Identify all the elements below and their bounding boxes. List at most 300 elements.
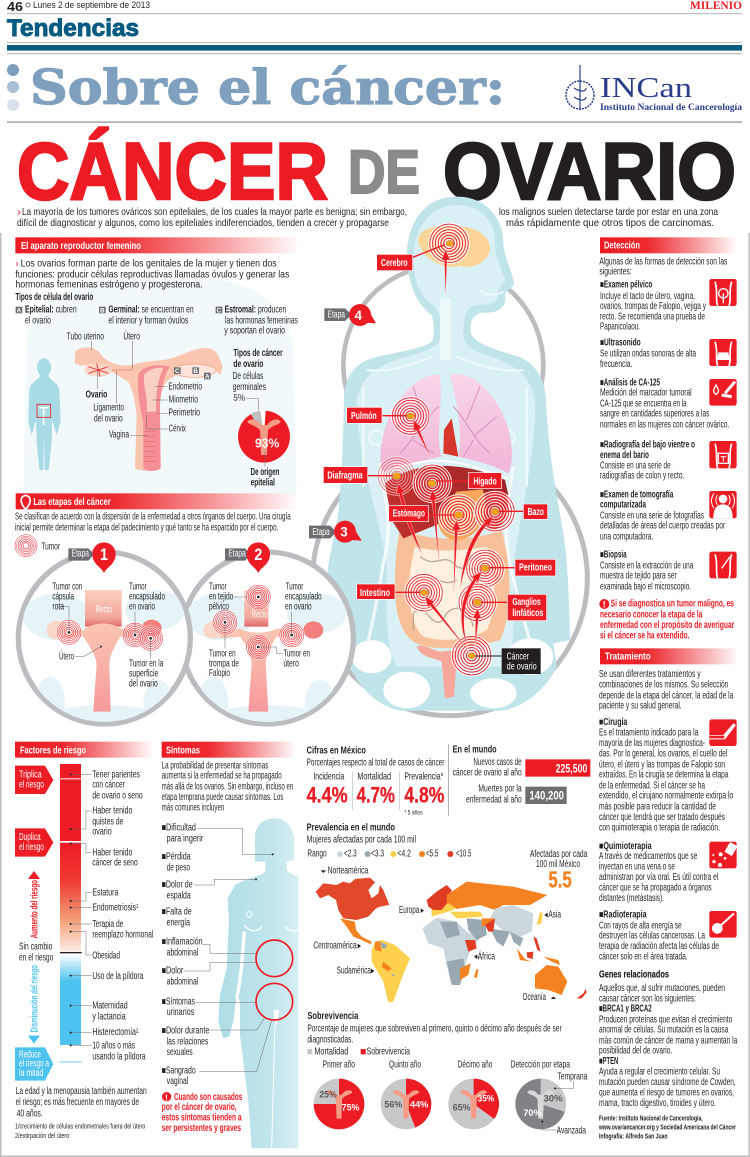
map labels: Centroamérica (313, 940, 357, 951)
risk factors: usando la píldora (92, 1052, 146, 1063)
description: Se clasifican de acuerdo con la dispersión de la enfermedad a otros órganos del cuerpo. Una cirugía (15, 511, 291, 522)
uterus diagram: Endometrio (168, 381, 202, 392)
label: Cáncer de ovario: de ovario (507, 661, 537, 672)
symptom list: ■Dolor durante (162, 1025, 210, 1036)
map labels: África (478, 949, 495, 962)
pie chart: tipos de cáncer de ovario: De origen (251, 467, 279, 478)
map legend (307, 849, 472, 860)
note: 2/extirpación del útero (15, 1133, 69, 1140)
map legend: <10.5 (456, 849, 472, 860)
icon: x-ray (709, 441, 737, 468)
legend: tumor: Tumor (41, 541, 60, 552)
genes relacionados: posibilidad del de ovario. (599, 1046, 672, 1057)
heading (600, 648, 737, 664)
genes relacionados: ■PTEN (599, 1056, 618, 1067)
label: Cerebro: Cerebro (381, 258, 408, 269)
cell types: las hormonas femeninas (225, 315, 298, 326)
stage 1 diagram: Recto (96, 605, 112, 616)
tumor rings (377, 223, 515, 676)
en el mundo (453, 745, 590, 805)
note (15, 1086, 147, 1140)
label: Hígado: Hígado (473, 476, 497, 487)
tag: triplica: Triplica (19, 770, 42, 781)
risk factors: Estatura (92, 888, 119, 899)
en el mundo: 225,500 (556, 761, 588, 775)
risk factors: y lactancia (92, 1012, 126, 1023)
page frame (0, 233, 750, 1157)
symptom list: energía (167, 918, 190, 929)
item: quimioterapia: distantes (metástasis). (599, 893, 664, 904)
pie: décimo año: Décimo año (458, 1059, 493, 1070)
symptom leaders (183, 828, 274, 1072)
cell types: Tipos de célula del ovario (15, 292, 93, 303)
stage 2 diagram: Recto (252, 609, 268, 620)
uterus diagram: del ovario (94, 414, 123, 425)
stage 2 diagram: Tumor (286, 581, 304, 592)
red zones (256, 940, 293, 1020)
stage 1 diagram: 1 (100, 545, 108, 564)
body figure with metastasis (stages 3 and 4) (309, 197, 587, 716)
risk factors (70, 769, 153, 1063)
heading (15, 742, 152, 758)
intestines (395, 530, 510, 648)
heading (16, 493, 296, 509)
icon: pelvic exam (709, 279, 737, 306)
heading and legend: Mortalidad (314, 1047, 348, 1058)
pie: décimo año: 65% (453, 1103, 471, 1113)
item: análisis CA-125: ■Análisis de CA-125 (600, 378, 660, 389)
pie: detección por etapa: 70% (523, 1108, 542, 1118)
panel: factores de riesgo (15, 742, 153, 1140)
label: Estómago (389, 506, 429, 522)
symptom list: las relaciones (167, 1036, 208, 1047)
diaphragm arc (380, 461, 508, 478)
main title (17, 127, 736, 217)
label: Diafragma: Diafragma (327, 470, 363, 481)
heart (443, 418, 458, 457)
cell types: el ovario (25, 315, 51, 326)
stage 2 diagram: Tumor en (283, 649, 310, 660)
label: Cerebro (377, 254, 413, 271)
red warning: necesario conocer la etapa de la (600, 610, 703, 621)
lungs (380, 374, 512, 473)
pie: primer año (314, 1059, 364, 1129)
uterus diagram: Miometrio (169, 395, 198, 406)
intro (599, 256, 727, 277)
heading (15, 237, 297, 253)
label: Ganglios linfáticos: Ganglios (512, 597, 541, 608)
intro: La probabilidad de presentar síntomas (162, 760, 268, 771)
item: ultrasonido: Se utilizan ondas sonoras de alta (600, 348, 696, 359)
pie: décimo año: 35% (478, 1094, 495, 1104)
stage 2 diagram: Etapa (228, 549, 246, 560)
item: cirugía (599, 717, 734, 833)
heading (162, 742, 294, 758)
cifras en méxico: 4.8% (404, 783, 444, 808)
tag: triplica: el riesgo (19, 780, 44, 791)
heading and legend: diagnosticadas. (307, 1034, 353, 1045)
badge: Etapa 4: Etapa (328, 309, 345, 320)
item: quimioterapia: ■Quimioterapia (599, 841, 652, 852)
cell types: B (100, 307, 105, 314)
logo: INCan: INCan (600, 72, 693, 104)
item: cirugía: ■Cirugía (599, 717, 628, 728)
risk factors: Haber tenido (92, 806, 133, 817)
cifras en méxico (307, 746, 445, 817)
stage 1 diagram: superficie (129, 669, 159, 680)
item: radiografía: ■Radiografía del bajo vientre o (600, 440, 695, 451)
item: radioterapia: cáncer solo en el área tratada. (599, 952, 688, 963)
cell types: Germinal: se encuentran en (108, 304, 194, 315)
pie chart: tipos de cáncer de ovario: 5% (233, 393, 245, 404)
badge: Etapa 3: 3 (340, 524, 348, 540)
heading and legend: Sobrevivencia (367, 1047, 410, 1058)
stage 1 diagram: Tumor (129, 581, 147, 592)
map legend: <3.3 (371, 849, 384, 860)
cifras en méxico: * 5 años (404, 810, 423, 817)
pie: décimo año (448, 1059, 499, 1129)
intro: siguientes: (599, 266, 632, 277)
banner: sobre el cáncer: Sobre el cáncer: (30, 60, 505, 116)
label: Bazo: Bazo (528, 507, 544, 518)
heading: El aparato reproductor femenino (21, 241, 141, 252)
icon: chemotherapy (709, 842, 738, 868)
icon: ultrasound (709, 339, 737, 366)
cell types: A (17, 307, 22, 314)
stage 1 diagram: rota (52, 601, 64, 612)
genes relacionados: ■BRCA1 y BRCA2 (599, 1004, 652, 1015)
axis labels: Sin cambio (19, 942, 53, 953)
item: radioterapia: Con rayos de alta energía se (599, 920, 682, 931)
stage 2 diagram (181, 542, 353, 735)
intro: etapa temprana puede causar síntomas. Los (162, 792, 283, 803)
stage 1 diagram: Útero (59, 649, 74, 662)
genes relacionados: causar cáncer son los siguientes: (599, 993, 696, 1004)
item: cirugía: Es el tratamiento indicado para la (599, 727, 699, 738)
symptom list: ■Síntomas (162, 997, 195, 1008)
label connectors (368, 245, 523, 602)
label: Ganglios linfáticos (507, 594, 547, 621)
risk factors: con cáncer (92, 780, 125, 791)
uterus diagram: C (175, 368, 180, 375)
pie: quinto año: 56% (384, 1099, 403, 1109)
liver and spleen (385, 466, 508, 538)
symptom list: abdominal (167, 948, 198, 959)
item: examen pélvico: Incluye el tacto de útero, vagina, (600, 291, 695, 302)
stage 1 diagram: Tumor con (52, 581, 82, 592)
pie chart: tipos de cáncer de ovario: germinales (233, 382, 266, 393)
label: Intestino (357, 584, 395, 599)
item: biopsia (600, 550, 694, 592)
label: Estómago: Estómago (393, 509, 425, 520)
map legend: <5.5 (426, 849, 439, 860)
icon: surgery (709, 719, 737, 746)
heading: Tratamiento (605, 652, 651, 663)
tag: reduce: el riesgo a (19, 1059, 49, 1070)
panel: síntomas (162, 742, 312, 1148)
icon: radiotherapy (709, 911, 737, 938)
intro text: difícil de diagnosticar y algunos, como los epiteliales indiferenciados, tienden a crecer y propagarse (17, 217, 389, 229)
description (15, 511, 291, 534)
arrows (396, 250, 493, 655)
tumor cores (393, 240, 499, 659)
label: Bazo (523, 504, 548, 519)
pie: quinto año: Quinto año (389, 1059, 421, 1070)
risk factors: Endometriosis¹ (92, 902, 139, 913)
main title: CÁNCER (17, 127, 328, 217)
red warning (162, 1092, 243, 1134)
pie: primer año: 25% (319, 1089, 337, 1099)
intro: aumenta si la enfermedad se ha propagado (162, 771, 282, 782)
main title: OVARIO (443, 127, 736, 217)
stage 2 diagram: pélvico (209, 601, 229, 612)
cifras en méxico: Prevalencia* (404, 772, 443, 783)
badge: Etapa 4: 4 (355, 307, 362, 323)
note: el riesgo; es más frecuente en mayores de (16, 1097, 139, 1108)
cifras en méxico: Incidencia (313, 772, 345, 783)
item: ultrasonido: ■Ultrasonido (600, 338, 641, 349)
red warning: por el cáncer de ovario, (162, 1102, 237, 1113)
note: La edad y la menopausia también aumentan (16, 1086, 147, 1097)
tag: duplica: Duplica (19, 832, 41, 843)
small uterus (417, 646, 460, 698)
item: tomografía: una computadora. (600, 531, 653, 542)
en el mundo: Muertes por la (478, 784, 522, 795)
intro: paciente y su salud general. (599, 701, 682, 712)
item: tomografía: ■Examen de tomografía (600, 490, 674, 501)
en el mundo: 140,200 (529, 789, 564, 803)
page header: Tendencias (7, 15, 139, 42)
item: quimioterapia: inyectan en una vena o se (599, 862, 675, 873)
label: Diafragma (323, 467, 368, 483)
female silhouette (218, 818, 298, 1148)
tag: duplica: el riesgo (19, 842, 44, 853)
risk scale bar (60, 764, 82, 1063)
logo: INCan (566, 65, 742, 113)
panel: tratamiento (598, 648, 738, 1140)
red warning: Cuando son causados (174, 1092, 243, 1103)
heading and legend: Porcentaje de mujeres que sobreviven al primero, quinto o décimo año después de ser (307, 1024, 562, 1035)
pie: detección por etapa: Avanzada (557, 1125, 586, 1136)
axis labels: Aumento del riesgo (29, 880, 40, 938)
symptom list: ■Sangrado (162, 1066, 196, 1077)
label: Cáncer de ovario (502, 648, 541, 674)
symptom list: abdominal (167, 977, 198, 988)
mexico figure: 5.5 (548, 867, 572, 893)
uterus diagram: Vagina (109, 429, 129, 440)
uterus diagram: B (193, 368, 198, 375)
item: biopsia: examinada bajo el microscopio. (600, 581, 691, 592)
item: radioterapia: ■Radioterapia (599, 909, 647, 920)
risk factors: cáncer de seno (92, 858, 138, 869)
pie: detección por etapa: Temprana (557, 1071, 588, 1082)
pie chart: tipos de cáncer de ovario: 93% (255, 436, 279, 451)
logo: INCan: Instituto Nacional de Cancerología (600, 103, 742, 113)
red warning (599, 599, 734, 642)
item: tomografía: computarizada (600, 500, 646, 511)
stage 1 diagram (18, 542, 190, 735)
heading: Detección (604, 241, 640, 252)
prevalencia heading: Mujeres afectadas por cada 100 mil (307, 835, 416, 846)
symptom list: sexuales (167, 1047, 193, 1058)
map labels: Norteamérica (328, 866, 369, 877)
badge: Etapa 3 (309, 521, 362, 543)
symptom list: ■Inflamación (162, 936, 203, 947)
cell types: el interior y forman óvulos (108, 315, 188, 326)
cifras en méxico: 4.7% (357, 783, 395, 808)
label: Ganglios linfáticos: linfáticos (512, 608, 544, 619)
en el mundo: Nuevos casos de (473, 757, 522, 768)
uterus diagram: Ovario (86, 389, 107, 400)
stage 1 diagram: cápsula (52, 592, 74, 603)
risk factors: Uso de la píldora (92, 971, 144, 982)
item: radiografía: radiografías de colon y recto. (600, 471, 684, 482)
pie: detección por etapa (511, 1059, 588, 1136)
item: biopsia: ■Biopsia (600, 550, 627, 561)
item: análisis CA-125: Medición del marcador tumoral (600, 388, 692, 399)
mexico figure: 100 mil México (536, 859, 580, 870)
stomach (438, 489, 485, 541)
label: Hígado (468, 473, 502, 489)
item: ultrasonido: frecuencia. (600, 359, 632, 370)
axis labels (19, 871, 54, 1044)
panel: cifras y mapa (307, 744, 590, 1003)
cell types: Estromal: producen (225, 304, 286, 315)
tag: reduce: la mitad (19, 1068, 43, 1079)
intro: Se usan diferentes tratamientos y (599, 669, 701, 680)
genes relacionados (599, 969, 738, 1109)
risk factors: Tener parientes (92, 769, 140, 780)
label: Cáncer de ovario: Cáncer (507, 651, 529, 662)
panel: etapas del cáncer (14, 493, 353, 735)
note: 1/crecimiento de células endometriales fuera del útero (15, 1124, 145, 1131)
uterus diagram: Útero (123, 329, 140, 342)
map legend: Rango (307, 849, 327, 860)
risk factors: Obesidad (92, 951, 120, 962)
item: radiografía: enema del bario (600, 450, 649, 461)
intro: más comunes incluyen (162, 802, 224, 813)
cell types: Epitelial: cubren (25, 304, 77, 315)
uterus diagram (67, 329, 223, 471)
cell types: C (217, 307, 222, 314)
symptom list: ■Pérdida (162, 852, 191, 863)
stage 2 diagram: Falopio (209, 668, 230, 679)
stage 2 diagram: Tumor (209, 581, 227, 592)
icon: blood sample (709, 379, 737, 406)
map legend: <4.2 (397, 849, 411, 860)
paragraph (15, 259, 289, 291)
heading: Síntomas (166, 746, 200, 757)
map legend: <2.3 (344, 849, 357, 860)
stage 2 diagram: en tejido (209, 592, 234, 603)
icon: CT scan (709, 491, 737, 518)
en el mundo: cáncer de ovario al año (453, 768, 522, 779)
label: Peritoneo (515, 559, 556, 576)
map labels: Sudamérica (337, 966, 371, 977)
pie chart: tipos de cáncer de ovario (233, 348, 290, 489)
credits: Infografía: Alfredo San Juan (599, 1131, 668, 1140)
label: Intestino: Intestino (360, 588, 390, 599)
red warning: ser persistentes y graves (162, 1123, 241, 1134)
genes relacionados: Genes relacionados (599, 969, 669, 980)
pie chart: tipos de cáncer de ovario: De células (233, 371, 263, 382)
en el mundo: En el mundo (453, 745, 497, 756)
legend: tumor (14, 534, 60, 557)
intro (599, 669, 734, 712)
heading: Factores de riesgo (20, 745, 86, 756)
stage 2 diagram: útero (283, 658, 299, 669)
risk factors: Terapia de (92, 919, 124, 930)
pie: primer año: 75% (342, 1103, 360, 1113)
pie: quinto año (381, 1059, 431, 1129)
world map (316, 878, 587, 1002)
label: Pulmón: Pulmón (351, 411, 377, 422)
cell types (15, 292, 298, 337)
badge: Etapa 3: Etapa (312, 527, 330, 538)
uterus diagram: A (205, 373, 210, 380)
stage 1 diagram: encapsulado (129, 592, 165, 603)
stage 2 diagram: Tumor en (209, 649, 236, 660)
red warning: si el cáncer se ha extendido. (600, 631, 689, 642)
heading: Las etapas del cáncer (33, 497, 111, 508)
risk factors: de ovario o seno (92, 790, 143, 801)
map labels: Oceanía (523, 992, 546, 1003)
red warning: ! (165, 1092, 168, 1102)
risk factors: Histerectomía² (92, 1027, 139, 1038)
pie: detección por etapa: Detección por etapa (511, 1059, 570, 1070)
item: tomografía (600, 490, 725, 542)
brain (418, 226, 490, 267)
stage 2 diagram: trompa de (209, 658, 239, 669)
paragraph: hormonas femeninas estrógeno y progesterona. (15, 280, 203, 291)
stage 2 diagram: en ovario (285, 601, 312, 612)
cifras en méxico: 4.4% (307, 783, 348, 808)
panel: aparato reproductor femenino (15, 237, 298, 493)
icon: biopsy (709, 552, 737, 578)
map labels: Europa (399, 905, 420, 916)
map labels: Asia (548, 909, 561, 920)
symptom list: vaginal (167, 1076, 188, 1087)
uterus diagram: Perimetrio (168, 408, 200, 419)
symptom list: para ingerir (167, 834, 204, 845)
item: quimioterapia: A través de medicamentos que se (599, 851, 698, 862)
axis labels: en el riesgo (19, 952, 54, 963)
risk factors: 10 años o más (92, 1041, 135, 1052)
paragraph: › (15, 259, 19, 270)
badge: Etapa 4 (324, 304, 376, 326)
note: 40 años. (17, 1109, 43, 1120)
intro (162, 760, 293, 813)
red warning: estos síntomas tienden a (162, 1113, 242, 1124)
tag: triplica (15, 766, 53, 794)
stage 1 diagram: Etapa (72, 549, 89, 560)
symptom list: ■Dificultad (162, 822, 196, 833)
symptom list: espalda (167, 891, 191, 902)
pie chart: tipos de cáncer de ovario: epitelial (251, 478, 275, 489)
symptom list: ■Dolor (162, 966, 184, 977)
item: ultrasonido (600, 338, 696, 370)
risk factors: reemplazo hormonal (92, 930, 153, 941)
item: biopsia: muestra de tejido para ser (600, 571, 677, 582)
pie: primer año: Primer año (323, 1059, 355, 1070)
en el mundo: enfermedad al año (466, 794, 522, 805)
prevalencia heading: Prevalencia en el mundo (307, 822, 395, 833)
risk factors: Maternidad (92, 1000, 128, 1011)
risk factors: quistes de (92, 816, 124, 827)
intro text (17, 206, 718, 229)
intro text: más rápidamente que otros tipos de carcinomas. (506, 217, 714, 229)
heading and legend (307, 1011, 562, 1058)
